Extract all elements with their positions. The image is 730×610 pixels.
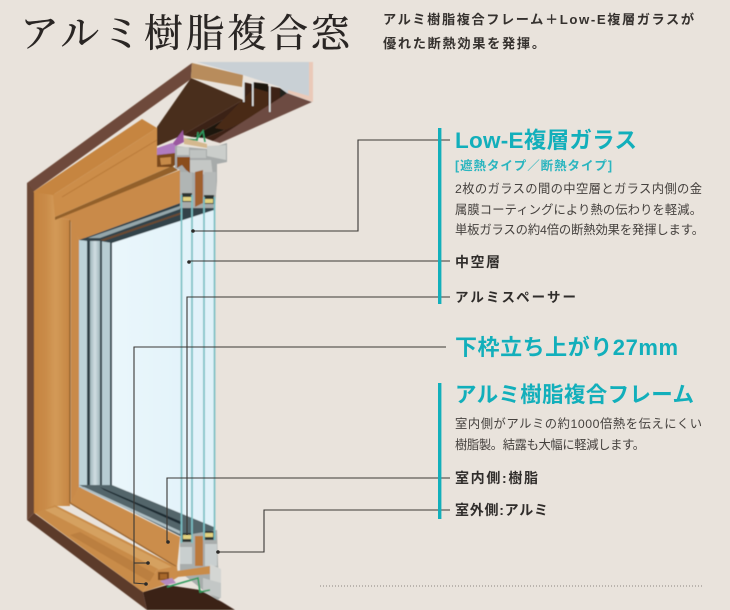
leader dots xyxy=(144,229,220,586)
title: アルミ樹脂複合窓 xyxy=(20,13,352,56)
sill orange xyxy=(35,505,177,592)
heading: Low-E glass: Low-E複層ガラス xyxy=(455,128,637,153)
glass lines xyxy=(182,195,214,543)
description: glass: 属膜コーティングにより熱の伝わりを軽減。 xyxy=(455,202,702,217)
soffit grooves xyxy=(183,82,252,137)
intro text xyxy=(383,11,694,51)
outer sill timber xyxy=(27,513,147,610)
teal bar upper xyxy=(438,128,441,304)
heading: sill: 下枠立ち上がり27mm xyxy=(455,335,678,360)
bottom orange panel xyxy=(70,487,180,567)
outer head timber xyxy=(27,63,192,198)
green gasket bottom xyxy=(167,578,210,592)
head gray section xyxy=(175,143,227,208)
timber end face xyxy=(191,63,243,87)
intro text: 優れた断熱効果を発揮。 xyxy=(383,35,545,51)
description: frame: 室内側がアルミの約1000倍熱を伝えにくい xyxy=(455,416,702,431)
metal fin edges xyxy=(243,80,271,112)
glass pane xyxy=(112,209,214,527)
jamb orange xyxy=(34,192,70,514)
left jamb timber xyxy=(27,183,34,520)
label: spacer: アルミスペーサー xyxy=(455,290,576,305)
label: exterior: 室外側:アルミ xyxy=(455,502,548,518)
green gasket xyxy=(184,131,205,142)
floor soffit xyxy=(143,585,235,610)
sash stripes xyxy=(79,238,112,488)
concrete wall block xyxy=(197,62,313,102)
bottom gray section xyxy=(180,530,221,600)
intro text: アルミ樹脂複合フレーム＋Low-E複層ガラスが xyxy=(383,11,694,27)
dotted divider xyxy=(320,585,703,587)
leader lines xyxy=(134,140,450,584)
description: frame xyxy=(455,416,702,452)
description: glass xyxy=(455,181,704,237)
label: interior: 室内側:樹脂 xyxy=(455,470,538,486)
sill section xyxy=(143,566,178,592)
bottom sash strips xyxy=(79,485,214,540)
purple insulation xyxy=(170,130,184,147)
heading: composite frame: アルミ樹脂複合フレーム xyxy=(455,383,694,407)
window cross-section illustration xyxy=(27,62,313,610)
subheading: [遮熱タイプ／断熱タイプ] xyxy=(455,158,612,173)
teal bar lower xyxy=(438,383,441,519)
head lower orange panel xyxy=(55,170,180,240)
description: glass: 2枚のガラスの間の中空層とガラス内側の金 xyxy=(455,181,702,196)
wood strip in section xyxy=(184,138,207,148)
head main orange profile xyxy=(33,119,157,195)
description: glass: 単板ガラスの約4倍の断熱効果を発揮します。 xyxy=(455,222,704,237)
head spacers xyxy=(182,193,192,202)
soffit right band xyxy=(213,93,312,143)
bottom spacers xyxy=(182,533,192,542)
label: air layer: 中空層 xyxy=(455,254,500,270)
soffit base xyxy=(157,78,243,146)
head rail strips xyxy=(79,197,214,243)
description: frame: 樹脂製。結露も大幅に軽減します。 xyxy=(455,437,645,452)
head section orange core xyxy=(157,153,175,167)
